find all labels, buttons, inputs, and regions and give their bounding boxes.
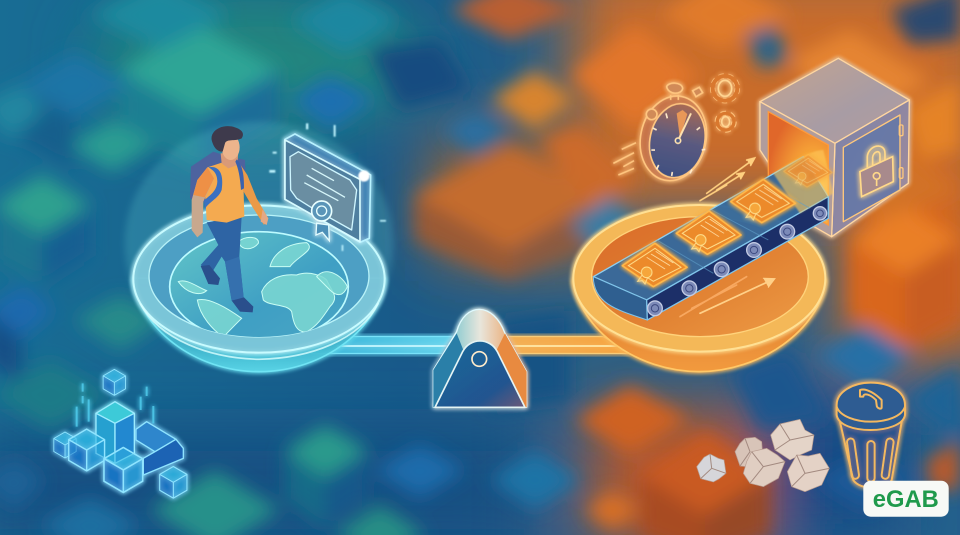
seesaw beam: right orange arm xyxy=(500,337,630,353)
bowl body xyxy=(573,280,826,372)
bowl rim xyxy=(573,205,825,352)
floating certificate xyxy=(285,134,371,242)
glass dome xyxy=(125,122,393,365)
certificates on the conveyor xyxy=(622,154,832,287)
motion arrows in bowl xyxy=(680,277,775,317)
right scale pan: orange bowl xyxy=(573,58,909,372)
trash can xyxy=(837,383,905,488)
door panel xyxy=(843,115,900,222)
conveyor belt xyxy=(593,150,833,320)
bowl rim xyxy=(133,205,385,353)
eGAB logo badge: eGAB xyxy=(873,486,939,513)
flat block xyxy=(136,422,183,475)
left scale pan: glass bowl, dome and globe xyxy=(125,122,393,372)
inner bowl xyxy=(592,217,808,337)
bowl body xyxy=(133,278,385,372)
eGAB logo badge xyxy=(863,481,949,517)
hinge tabs xyxy=(899,125,903,178)
person with backpack xyxy=(190,126,268,312)
conveyor rollers xyxy=(648,207,827,316)
motion arrows toward safe xyxy=(700,158,755,201)
padlock xyxy=(860,146,893,197)
stopwatch with gears xyxy=(613,76,737,187)
safe opening glow xyxy=(768,112,828,225)
safe with padlock xyxy=(760,58,909,237)
icon: stacked data cubes xyxy=(54,369,187,498)
paper balls xyxy=(697,419,829,492)
seesaw fulcrum xyxy=(433,309,527,407)
bowl highlight xyxy=(140,303,378,359)
paper balls and trash can xyxy=(697,383,905,492)
rising data lines xyxy=(77,383,153,427)
inner bowl xyxy=(149,215,369,337)
sparkles xyxy=(269,123,386,251)
seesaw beam: left blue arm xyxy=(310,337,460,353)
globe xyxy=(170,232,348,342)
tall cube xyxy=(96,402,134,463)
